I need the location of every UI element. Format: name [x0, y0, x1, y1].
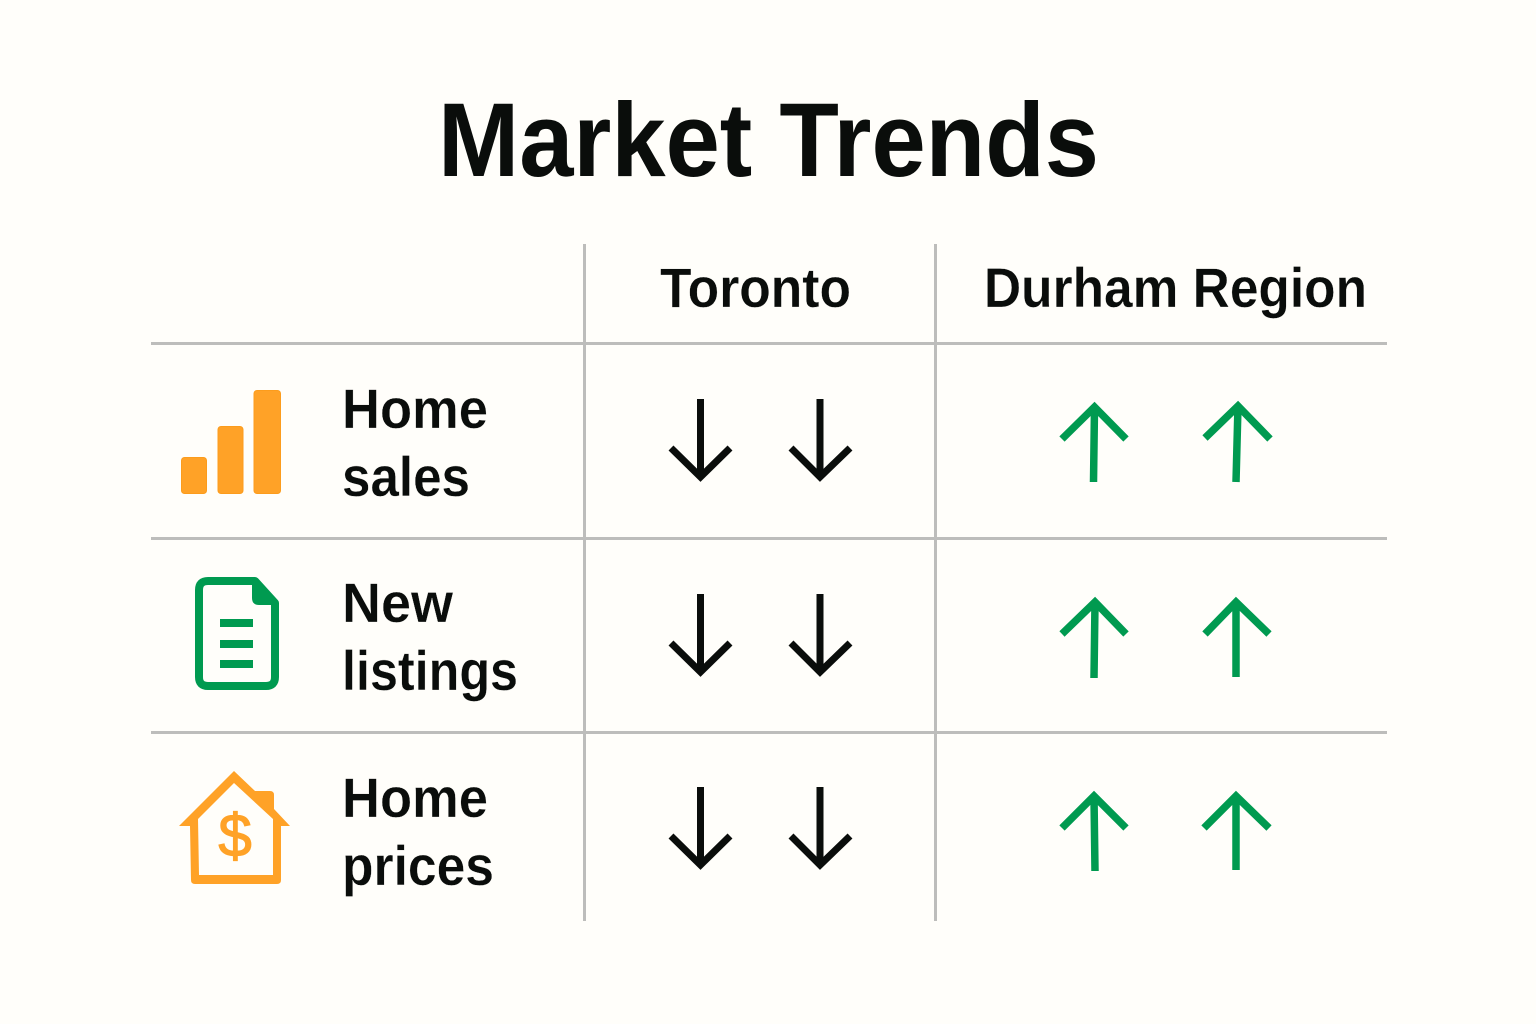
row label: New listings [342, 571, 518, 702]
row label: Home prices [342, 766, 494, 897]
row label: Home prices: prices [342, 834, 494, 897]
Durham arrows: Home sales [1062, 406, 1270, 482]
icon: house with dollar sign: $ [218, 802, 252, 869]
icon: bar chart [182, 390, 280, 494]
title: Market Trends [438, 82, 1099, 199]
row label: Home sales: sales [342, 445, 470, 508]
row label: New listings: New [342, 571, 453, 634]
Toronto arrows: Home prices [671, 787, 850, 865]
icon: house with dollar sign [179, 771, 290, 884]
row label: Home sales [342, 377, 488, 508]
column heading: Toronto: Toronto [660, 256, 851, 319]
column heading: Durham Region: Durham Region [984, 256, 1367, 319]
Durham arrows: New listings [1062, 602, 1269, 678]
row label: Home sales: Home [342, 377, 488, 440]
Toronto arrows: New listings [671, 594, 850, 672]
row label: New listings: listings [342, 639, 518, 702]
icon: document [199, 580, 278, 686]
row label: Home prices: Home [342, 766, 488, 829]
Durham arrows: Home prices [1062, 796, 1269, 871]
table grid [151, 244, 1387, 921]
Toronto arrows: Home sales [671, 399, 850, 477]
